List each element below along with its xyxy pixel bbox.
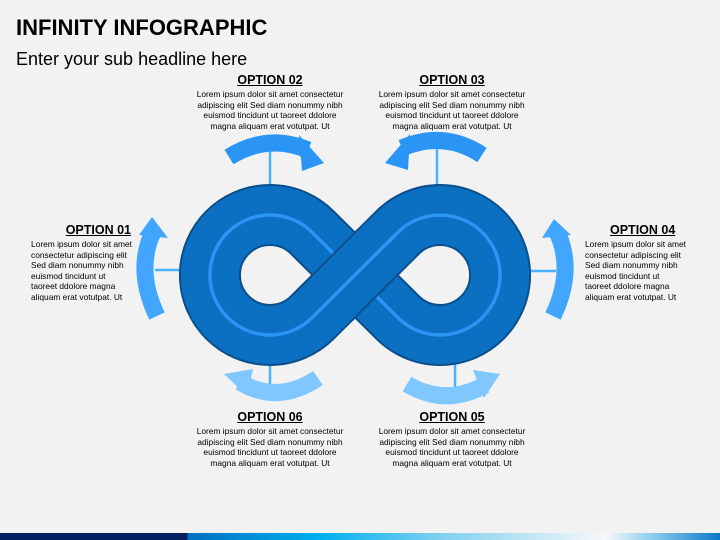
infinity shape [210,215,500,335]
text: option 04: consectetur adipiscing elit [585,250,681,260]
subtitle: Enter your sub headline here [16,49,247,69]
text: option 04: Lorem ipsum dolor sit amet [585,239,686,249]
text: option 04: OPTION 04 [610,223,675,237]
text: option 01: consectetur adipiscing elit [31,250,127,260]
text: option 05 [379,410,526,468]
text: option 02: adipiscing elit Sed diam nonummy nibh [197,100,343,110]
text: option 02: OPTION 02 [237,73,303,87]
text: option 03: magna aliquam erat votutpat. Ut [392,121,512,131]
text: option 02: magna aliquam erat votutpat. Ut [210,121,330,131]
text: option 03: euismod tincidunt ut taoreet ddolore [385,110,519,120]
arrow: right [542,219,571,316]
text: option 02 [197,73,344,131]
text: option 01: aliquam erat votutpat. Ut [31,292,122,302]
text: option 05: euismod tincidunt ut taoreet ddolore [385,447,519,457]
bottom bar [0,533,720,540]
arrow: top-left [229,135,324,171]
text: option 03: Lorem ipsum dolor sit amet consectetur [379,89,525,99]
text: option 01: OPTION 01 [66,223,131,237]
crossing shadow and front strand [330,250,380,300]
text: option 06: adipiscing elit Sed diam nonummy nibh [197,437,343,447]
text: option 06: magna aliquam erat votutpat. Ut [210,458,330,468]
text: option 01 [31,223,132,302]
text: option 04: Sed diam nonummy nibh [585,260,678,270]
arrow: bottom-right [407,370,500,398]
text: option 02: Lorem ipsum dolor sit amet consectetur [197,89,343,99]
text: option 05: Lorem ipsum dolor sit amet consectetur [379,426,525,436]
text: option 01: euismod tincidunt ut [31,271,106,281]
text: option 01: taoreet ddolore magna [31,281,115,291]
text: option 03 [379,73,526,131]
text: option 04 [585,223,686,302]
connector lines [155,145,556,392]
text: option 06 [197,410,344,468]
text: option 03: adipiscing elit Sed diam nonummy nibh [379,100,525,110]
text: option 05: magna aliquam erat votutpat. Ut [392,458,512,468]
text: option 04: euismod tincidunt ut [585,271,660,281]
text: option 05: OPTION 05 [419,410,485,424]
text: option 04: taoreet ddolore magna [585,281,669,291]
text: option 05: adipiscing elit Sed diam nonummy nibh [379,437,525,447]
arrow: top-right [385,134,482,170]
text: option 06: OPTION 06 [237,410,303,424]
title: INFINITY INFOGRAPHIC [16,15,267,40]
text: option 03: OPTION 03 [419,73,485,87]
text: option 04: aliquam erat votutpat. Ut [585,292,676,302]
text: option 02: euismod tincidunt ut taoreet ddolore [203,110,337,120]
text: option 06: euismod tincidunt ut taoreet ddolore [203,447,337,457]
arrow: bottom-left [224,369,318,396]
text: option 01: Lorem ipsum dolor sit amet [31,239,132,249]
arrow: left [139,217,168,316]
text: option 01: Sed diam nonummy nibh [31,260,124,270]
text: option 06: Lorem ipsum dolor sit amet consectetur [197,426,343,436]
